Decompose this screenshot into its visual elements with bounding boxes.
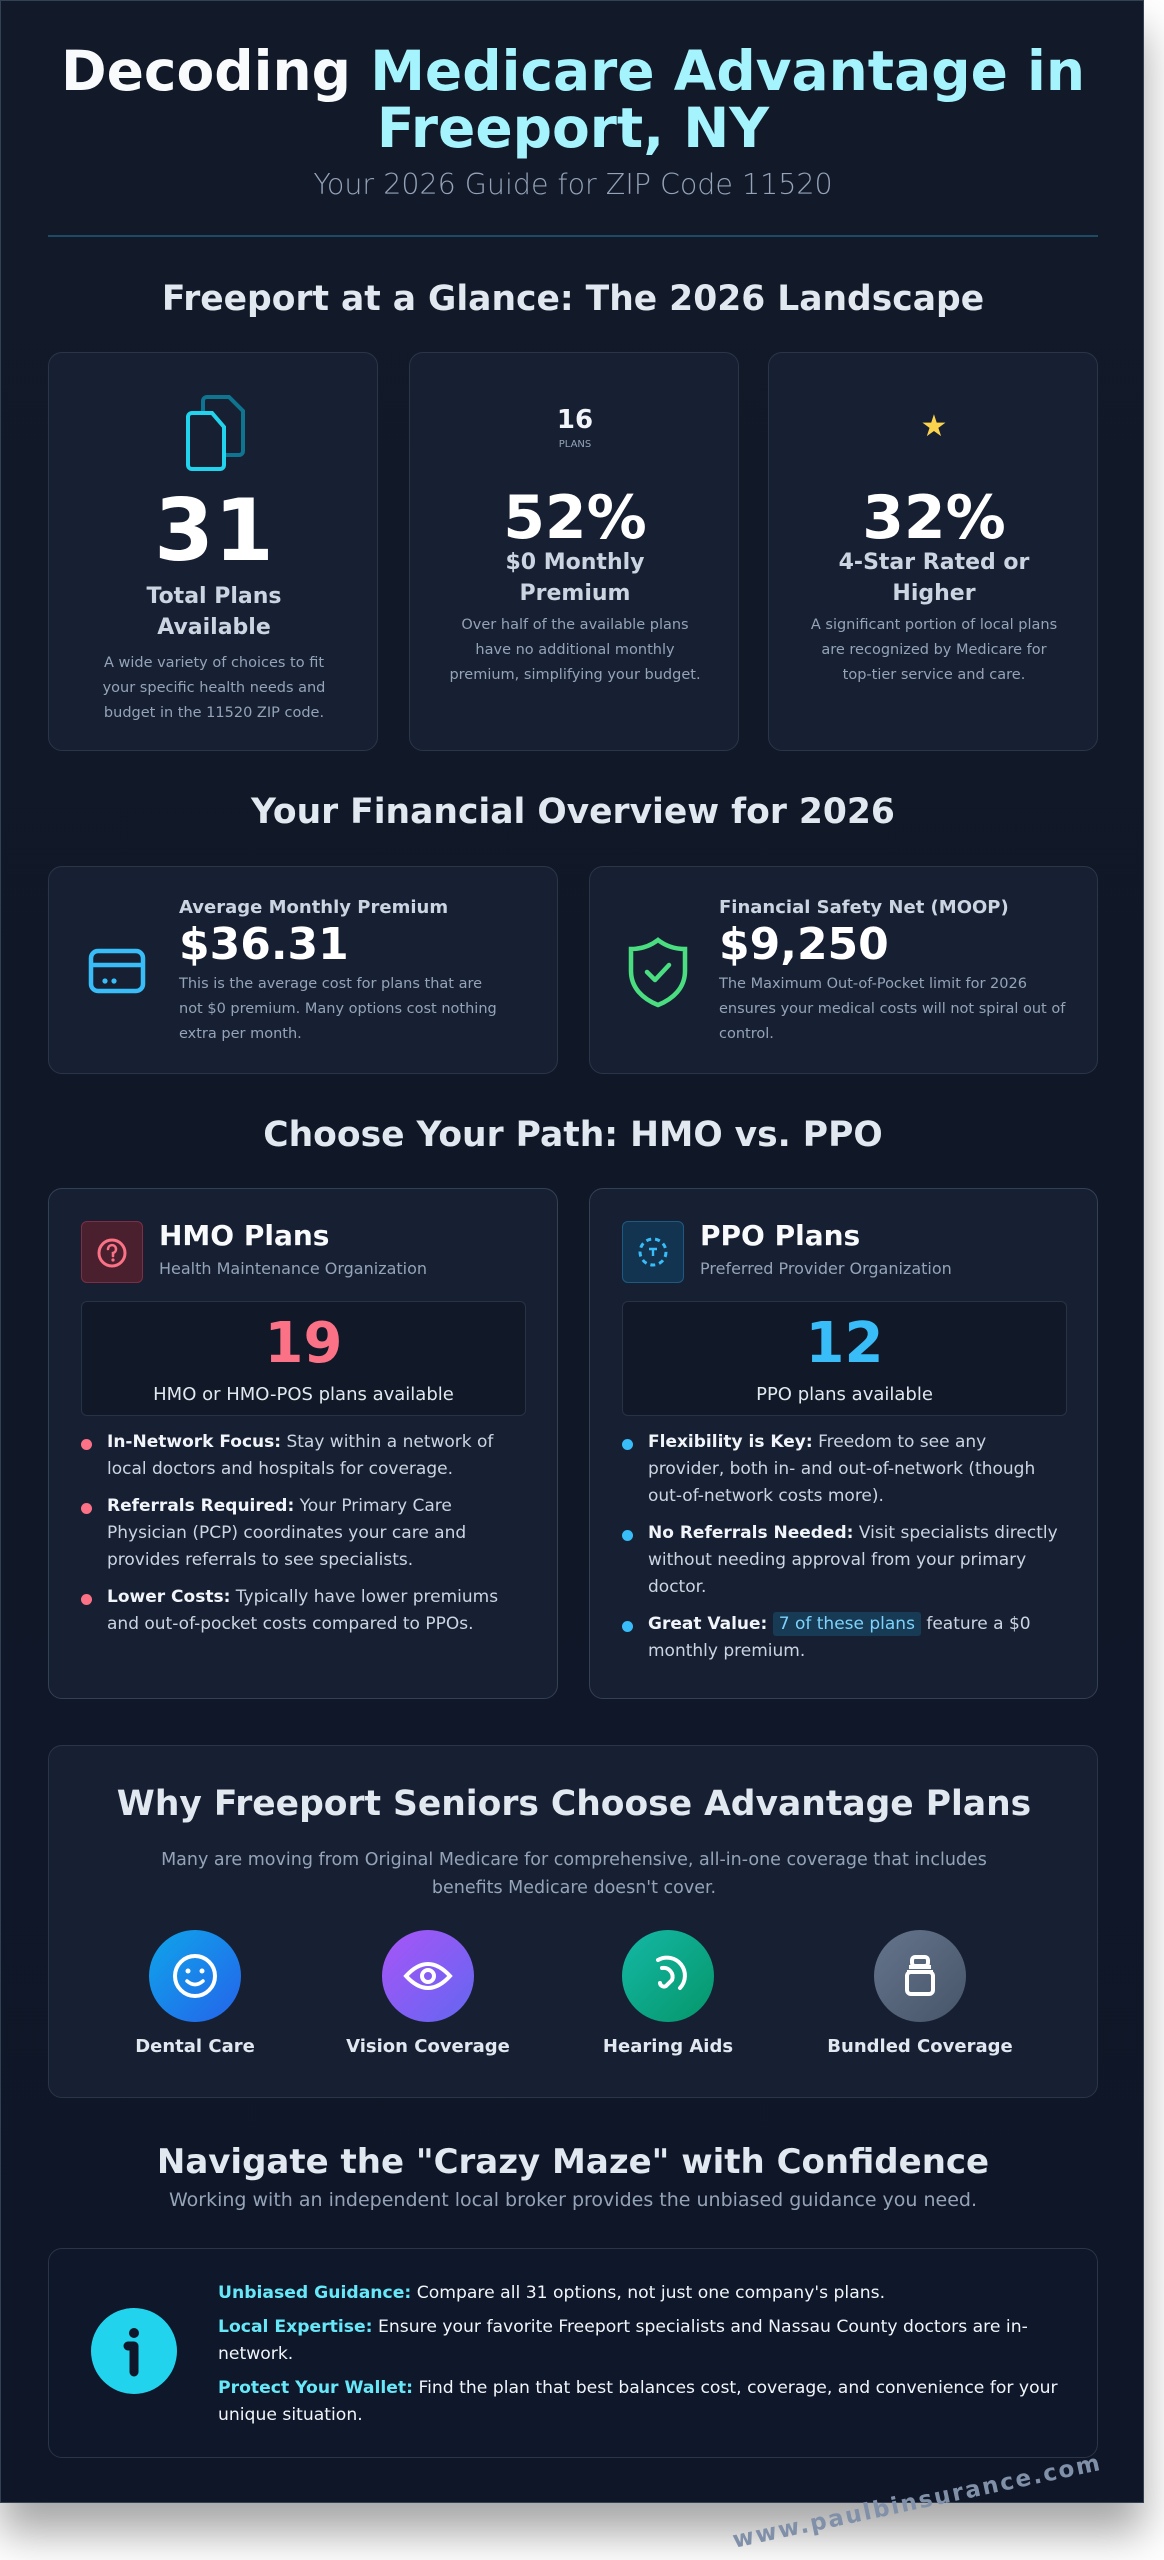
card: MOOP: The Maximum Out-of-Pocket limit for 2026 ensures your medical costs will not spiral out of control. — [719, 976, 1065, 1042]
card: avg premium: This is the average cost for plans that are not $0 premium. Many options cost nothing extra per month. — [179, 976, 497, 1042]
stat: 19: 19 — [265, 1311, 342, 1376]
card: avg premium — [48, 866, 558, 1074]
callout: broker benefits: Protect Your Wallet: Find the plan that best balances cost, coverage, and convenience for your unique situation. — [218, 2378, 1058, 2425]
icon: vision — [346, 1930, 510, 2057]
bullets: Referrals Required: Your Primary Care Physician (PCP) coordinates your care and provides referrals to see specialists. — [107, 1496, 466, 1570]
icon: star: ★ — [921, 409, 947, 444]
card: 4-star: 32% — [862, 483, 1006, 553]
watermark: www.paulbinsurance.com — [730, 2450, 1104, 2554]
icon: hearing: Hearing Aids — [603, 2036, 733, 2057]
card: total plans: 31 — [154, 481, 274, 581]
icon: documents — [186, 395, 245, 471]
subtitle: Your 2026 Guide for ZIP Code 11520 — [313, 168, 833, 201]
panel: why seniors choose: Many are moving from Original Medicare for comprehensive, all-in-one coverage that includes benefits Medicare doesn't cover. — [161, 1850, 987, 1898]
icon: shield — [628, 937, 688, 1008]
panel: HMO — [48, 1188, 558, 1699]
bullets — [81, 1432, 498, 1634]
card: $0 premium — [409, 352, 739, 751]
stat: 19: HMO or HMO-POS plans available — [153, 1384, 454, 1405]
card: $0 premium: Premium — [520, 581, 630, 606]
card: total plans: A wide variety of choices to fit your specific health needs and budget in the 11520 ZIP code. — [103, 655, 325, 721]
panel: why seniors choose: Why Freeport Seniors Choose Advantage Plans — [117, 1784, 1031, 1824]
card: $0 premium: $0 Monthly — [505, 550, 644, 575]
title — [61, 39, 1085, 160]
panel: PPO: Preferred Provider Organization — [700, 1259, 952, 1278]
icon: bundled: Bundled Coverage — [827, 2036, 1013, 2057]
bullets: Great Value: 7 of these plans feature a $0 monthly premium. — [648, 1614, 1031, 1661]
panel: why seniors choose — [48, 1745, 1098, 2098]
bullets: Lower Costs: Typically have lower premiums and out-of-pocket costs compared to PPOs. — [107, 1587, 498, 1634]
panel: PPO: PPO Plans — [700, 1219, 860, 1252]
subheading: Working with an independent local broker provides the unbiased guidance you need. — [169, 2189, 977, 2211]
icon: dental — [135, 1930, 255, 2057]
callout: broker benefits — [48, 2248, 1098, 2458]
icon: credit card — [88, 948, 146, 994]
icon: PPO — [622, 1221, 684, 1283]
card: avg premium: Average Monthly Premium — [179, 897, 448, 918]
card: MOOP — [589, 866, 1098, 1074]
icon: hearing — [603, 1930, 733, 2057]
card: avg premium: $36.31 — [179, 919, 349, 970]
stat: 12 — [622, 1301, 1067, 1416]
stat: 19 — [81, 1301, 526, 1416]
heading: financial: Your Financial Overview for 2026 — [251, 792, 895, 832]
card: 4-star — [768, 352, 1098, 751]
bullets — [622, 1432, 1058, 1661]
panel: HMO: HMO Plans — [159, 1219, 329, 1252]
card: $0 premium: 16 — [557, 405, 593, 435]
bullets: Flexibility is Key: Freedom to see any provider, both in- and out-of-network (though out-of-network costs more). — [648, 1432, 1035, 1506]
heading: HMO vs PPO: Choose Your Path: HMO vs. PPO — [263, 1115, 883, 1155]
card: 4-star: Higher — [892, 581, 976, 606]
icon: dental: Dental Care — [135, 2036, 255, 2057]
title: Freeport, NY — [377, 96, 769, 160]
card: 4-star: A significant portion of local plans are recognized by Medicare for top-tier service and care. — [811, 617, 1057, 683]
callout: broker benefits: Local Expertise: Ensure your favorite Freeport specialists and Nassau County doctors are in-network. — [218, 2317, 1028, 2364]
panel: HMO: Health Maintenance Organization — [159, 1259, 427, 1278]
bullets: No Referrals Needed: Visit specialists directly without needing approval from your primary doctor. — [648, 1523, 1058, 1597]
callout: broker benefits: Unbiased Guidance: Compare all 31 options, not just one company's plans. — [218, 2283, 885, 2303]
card: total plans — [48, 352, 378, 751]
stat: 12: 12 — [806, 1311, 883, 1376]
title: Decoding Medicare Advantage in — [61, 39, 1085, 103]
card: total plans: Available — [157, 615, 271, 640]
heading: navigate: Navigate the "Crazy Maze" with Confidence — [157, 2142, 989, 2182]
card: 4-star: 4-Star Rated or — [839, 550, 1029, 575]
card: total plans: Total Plans — [146, 584, 282, 609]
icon: info — [91, 2308, 177, 2394]
card: MOOP: Financial Safety Net (MOOP) — [719, 897, 1009, 918]
card: MOOP: $9,250 — [719, 919, 889, 970]
heading: at a glance: Freeport at a Glance: The 2026 Landscape — [162, 279, 984, 319]
icon: bundled — [827, 1930, 1013, 2057]
icon: vision: Vision Coverage — [346, 2036, 510, 2057]
stat: 12: PPO plans available — [756, 1384, 933, 1405]
card: $0 premium: 52% — [503, 483, 647, 553]
card: $0 premium: Over half of the available plans have no additional monthly premium, simplifying your budget. — [449, 617, 701, 683]
bullets: In-Network Focus: Stay within a network of local doctors and hospitals for coverage. — [107, 1432, 493, 1479]
panel: PPO — [589, 1188, 1098, 1699]
card: $0 premium: PLANS — [559, 439, 591, 450]
icon: HMO — [81, 1221, 143, 1283]
